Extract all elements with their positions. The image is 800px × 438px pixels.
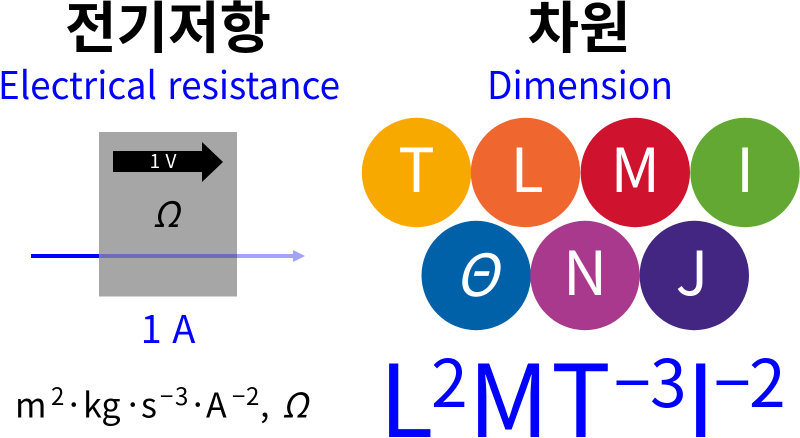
circle: Theta: Θ — [455, 229, 504, 313]
unit formula: s — [141, 378, 157, 428]
diagram: resistor with voltage and current — [31, 132, 305, 296]
unit formula: · — [128, 378, 138, 428]
circle: M — [581, 118, 690, 227]
dimension formula: 2 — [749, 331, 786, 427]
circle: I — [690, 118, 800, 227]
dimension formula: − — [714, 331, 751, 427]
circle: Theta — [422, 221, 531, 330]
unit formula: − — [232, 377, 245, 412]
dimension formula: 2 — [431, 331, 468, 427]
dimension formula: 3 — [650, 331, 687, 427]
unit formula: · — [193, 378, 202, 428]
subheading: dimension: Dimension — [487, 55, 673, 110]
subheading: electrical resistance: Electrical resistance — [0, 55, 340, 110]
circle: J — [640, 221, 749, 330]
unit formula: kg — [83, 378, 121, 428]
unit formula: 3 — [175, 377, 188, 412]
arrow: voltage — [113, 142, 223, 182]
unit formula: , — [260, 378, 270, 428]
unit formula: Ω — [282, 378, 311, 428]
dimension formula — [379, 321, 786, 438]
label: current: 1 A — [141, 299, 195, 354]
resistance symbol: Ω — [153, 187, 183, 238]
circle: T — [362, 118, 471, 227]
dimension circles — [362, 118, 800, 330]
unit formula: m — [15, 378, 46, 428]
circle: I: I — [736, 121, 754, 210]
unit formula: A — [206, 378, 227, 428]
unit formula: 2 — [246, 377, 259, 412]
circle: N: N — [563, 224, 607, 313]
dimension formula: − — [614, 331, 651, 427]
resistor block — [99, 132, 237, 296]
circle: M: M — [611, 121, 660, 210]
unit formula: − — [160, 377, 173, 412]
circle: L — [471, 118, 580, 227]
unit formula — [15, 377, 311, 428]
circle: L: L — [510, 121, 544, 210]
unit formula: 2 — [51, 377, 64, 412]
circle: N — [530, 221, 640, 330]
unit formula: · — [69, 378, 78, 428]
arrow: current — [31, 250, 305, 262]
circle: J: J — [676, 224, 708, 313]
arrow: voltage: 1 V — [150, 147, 176, 174]
circle: T: T — [398, 121, 435, 210]
